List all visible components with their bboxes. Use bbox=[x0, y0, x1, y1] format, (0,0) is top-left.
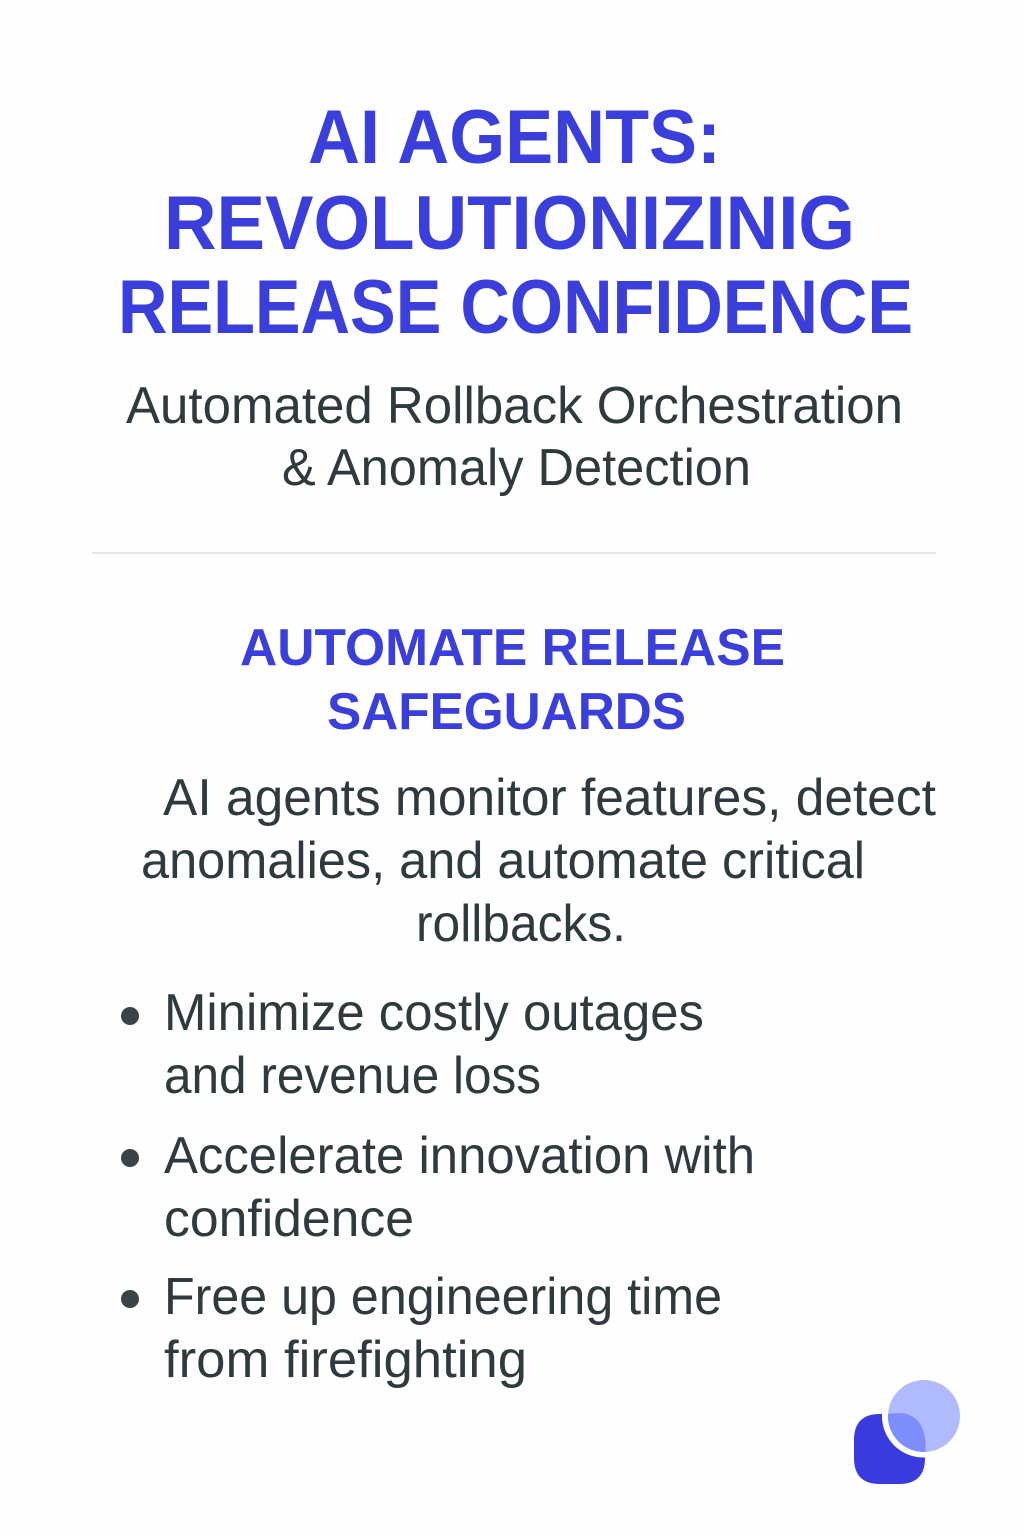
bullet: accelerate innovation bbox=[121, 1127, 755, 1248]
bullet: free engineering time bbox=[121, 1268, 722, 1389]
bullet: free engineering time: from firefighting bbox=[164, 1331, 527, 1389]
icon: logo bbox=[854, 1380, 960, 1484]
subtitle bbox=[126, 377, 903, 497]
subtitle: Automated Rollback Orchestration bbox=[126, 377, 903, 435]
intro paragraph: rollbacks. bbox=[416, 895, 626, 953]
subtitle: & Anomaly Detection bbox=[282, 439, 751, 497]
title: REVOLUTIONIZINIG bbox=[164, 181, 855, 266]
bullet list bbox=[121, 984, 755, 1389]
bullet: accelerate innovation: Accelerate innovation with bbox=[164, 1127, 755, 1185]
section heading: AUTOMATE RELEASE bbox=[240, 619, 785, 677]
section heading bbox=[240, 619, 785, 741]
bullet: accelerate innovation: confidence bbox=[164, 1190, 414, 1248]
bullet: minimize outages: and revenue loss bbox=[164, 1047, 541, 1105]
title: RELEASE CONFIDENCE bbox=[118, 265, 913, 350]
intro paragraph: anomalies, and automate critical bbox=[141, 832, 865, 890]
bullet: minimize outages: Minimize costly outages bbox=[164, 984, 704, 1042]
bullet: minimize outages bbox=[121, 984, 704, 1105]
intro paragraph bbox=[141, 769, 937, 953]
title: AI AGENTS: bbox=[308, 95, 721, 180]
bullet: free engineering time: Free up engineering time bbox=[164, 1268, 722, 1326]
intro paragraph: AI agents monitor features, detect bbox=[163, 769, 937, 827]
section heading: SAFEGUARDS bbox=[327, 683, 686, 741]
title bbox=[118, 95, 913, 350]
